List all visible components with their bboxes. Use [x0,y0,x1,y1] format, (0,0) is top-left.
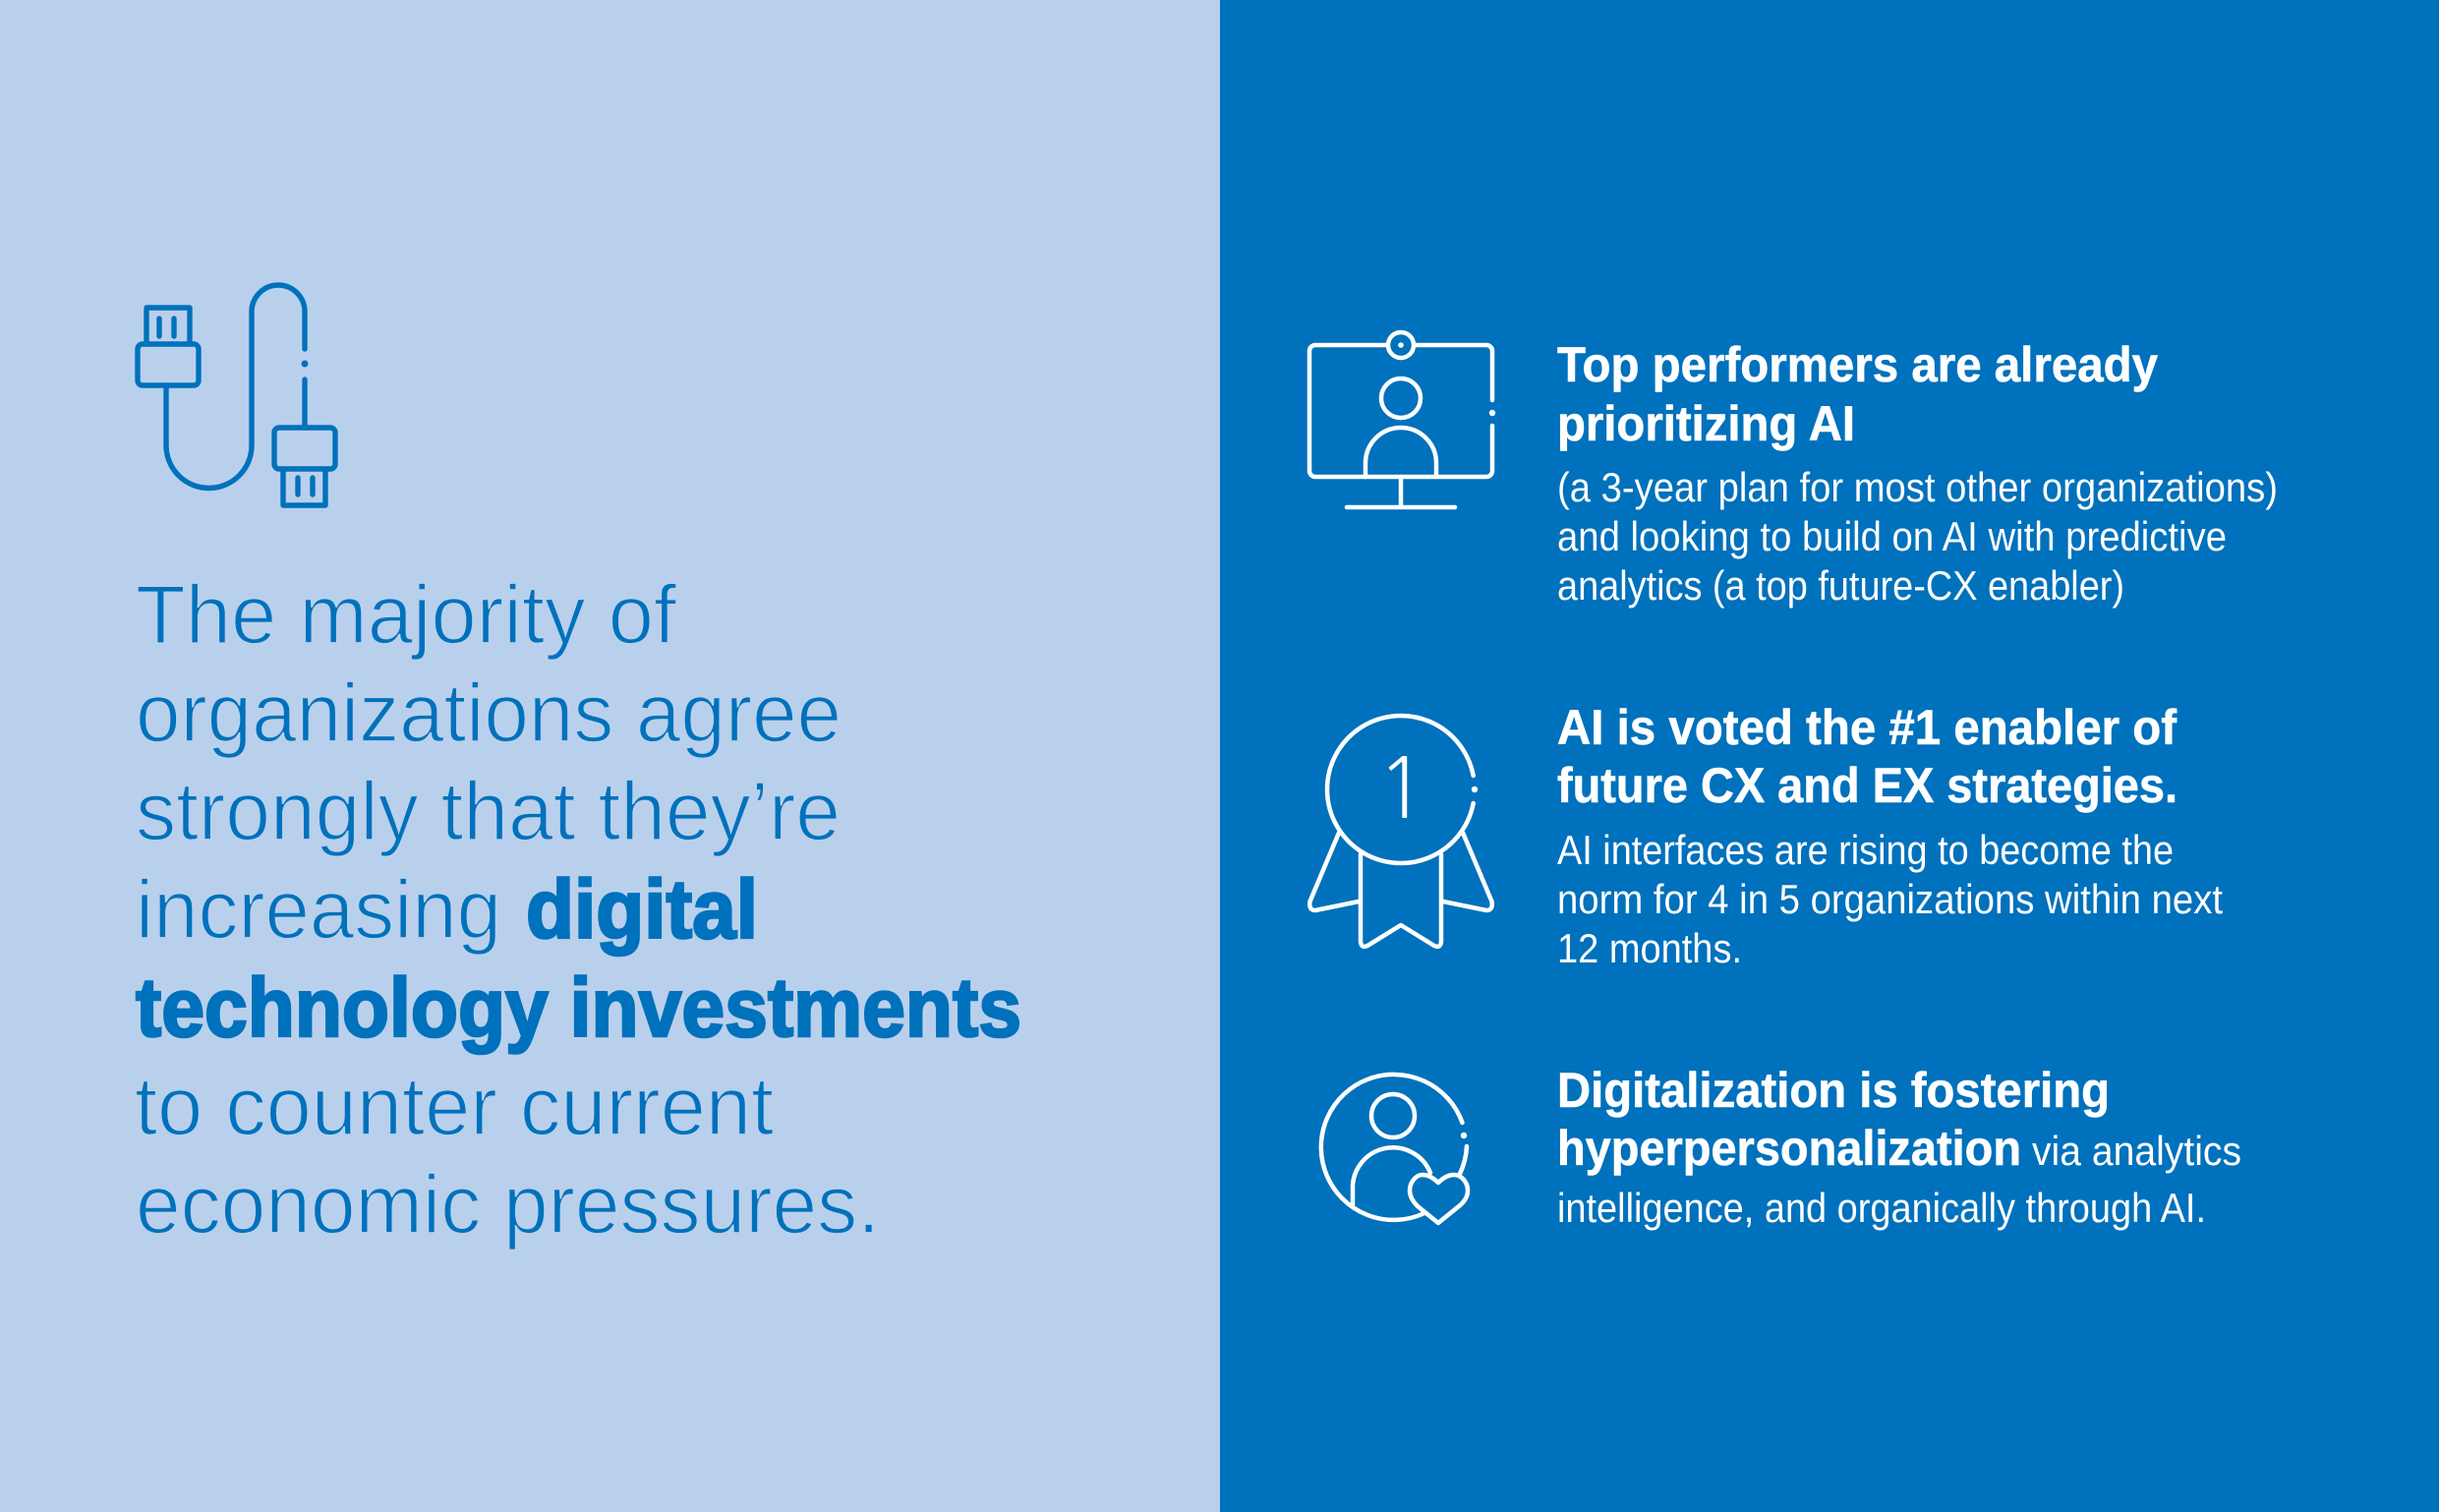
text block: AI voted number one enabler: future CX and EX strategies. [1557,758,2178,813]
panel: left statement [0,0,1220,1512]
text block: digitalization: intelligence, and organically through AI. [1557,1185,2206,1231]
icon: USB cable [138,285,335,505]
icon: video call monitor [1309,332,1495,507]
text block: top performers: and looking to build on AI with predictive [1557,513,2227,559]
text block: digitalization: via analytics [2032,1128,2241,1174]
text block: digitalization: Digitalization is fostering [1557,1063,2110,1118]
icon: person with heart [1321,1075,1468,1223]
text block: top performers [1557,337,2278,609]
heading: main statement: digital [526,863,758,956]
text block: AI voted number one enabler [1557,700,2223,971]
text block: AI voted number one enabler: 12 months. [1557,925,1742,971]
heading: main statement: economic pressures. [136,1158,880,1250]
heading: main statement: to counter current [135,1060,774,1152]
text block: top performers: (a 3-year plan for most other organizations) [1557,464,2278,510]
heading: main statement: strongly that they’re [136,765,841,857]
text block: digitalization: hyperpersonalization [1557,1121,2021,1176]
panel: right findings [1220,0,2439,1512]
heading: main statement: increasing [136,863,501,956]
heading: main statement: The majority of [136,568,677,661]
text block: top performers: prioritizing AI [1557,396,1855,451]
heading: main statement: technology investments [136,961,1021,1054]
icon: award ribbon with number one [1309,716,1492,947]
text block: top performers: Top performers are already [1557,337,2158,392]
heading: main statement [135,568,1021,1250]
icon: award ribbon with number one: 1 [1376,746,1427,831]
text block: AI voted number one enabler: AI is voted the #1 enabler of [1557,700,2177,755]
text block: AI voted number one enabler: norm for 4 in 5 organizations within next [1557,876,2223,922]
text block: top performers: analytics (a top future-CX enabler) [1557,562,2124,609]
text block: digitalization [1557,1063,2241,1231]
heading: main statement: organizations agree [136,667,842,759]
text block: AI voted number one enabler: AI interfaces are rising to become the [1557,827,2174,873]
